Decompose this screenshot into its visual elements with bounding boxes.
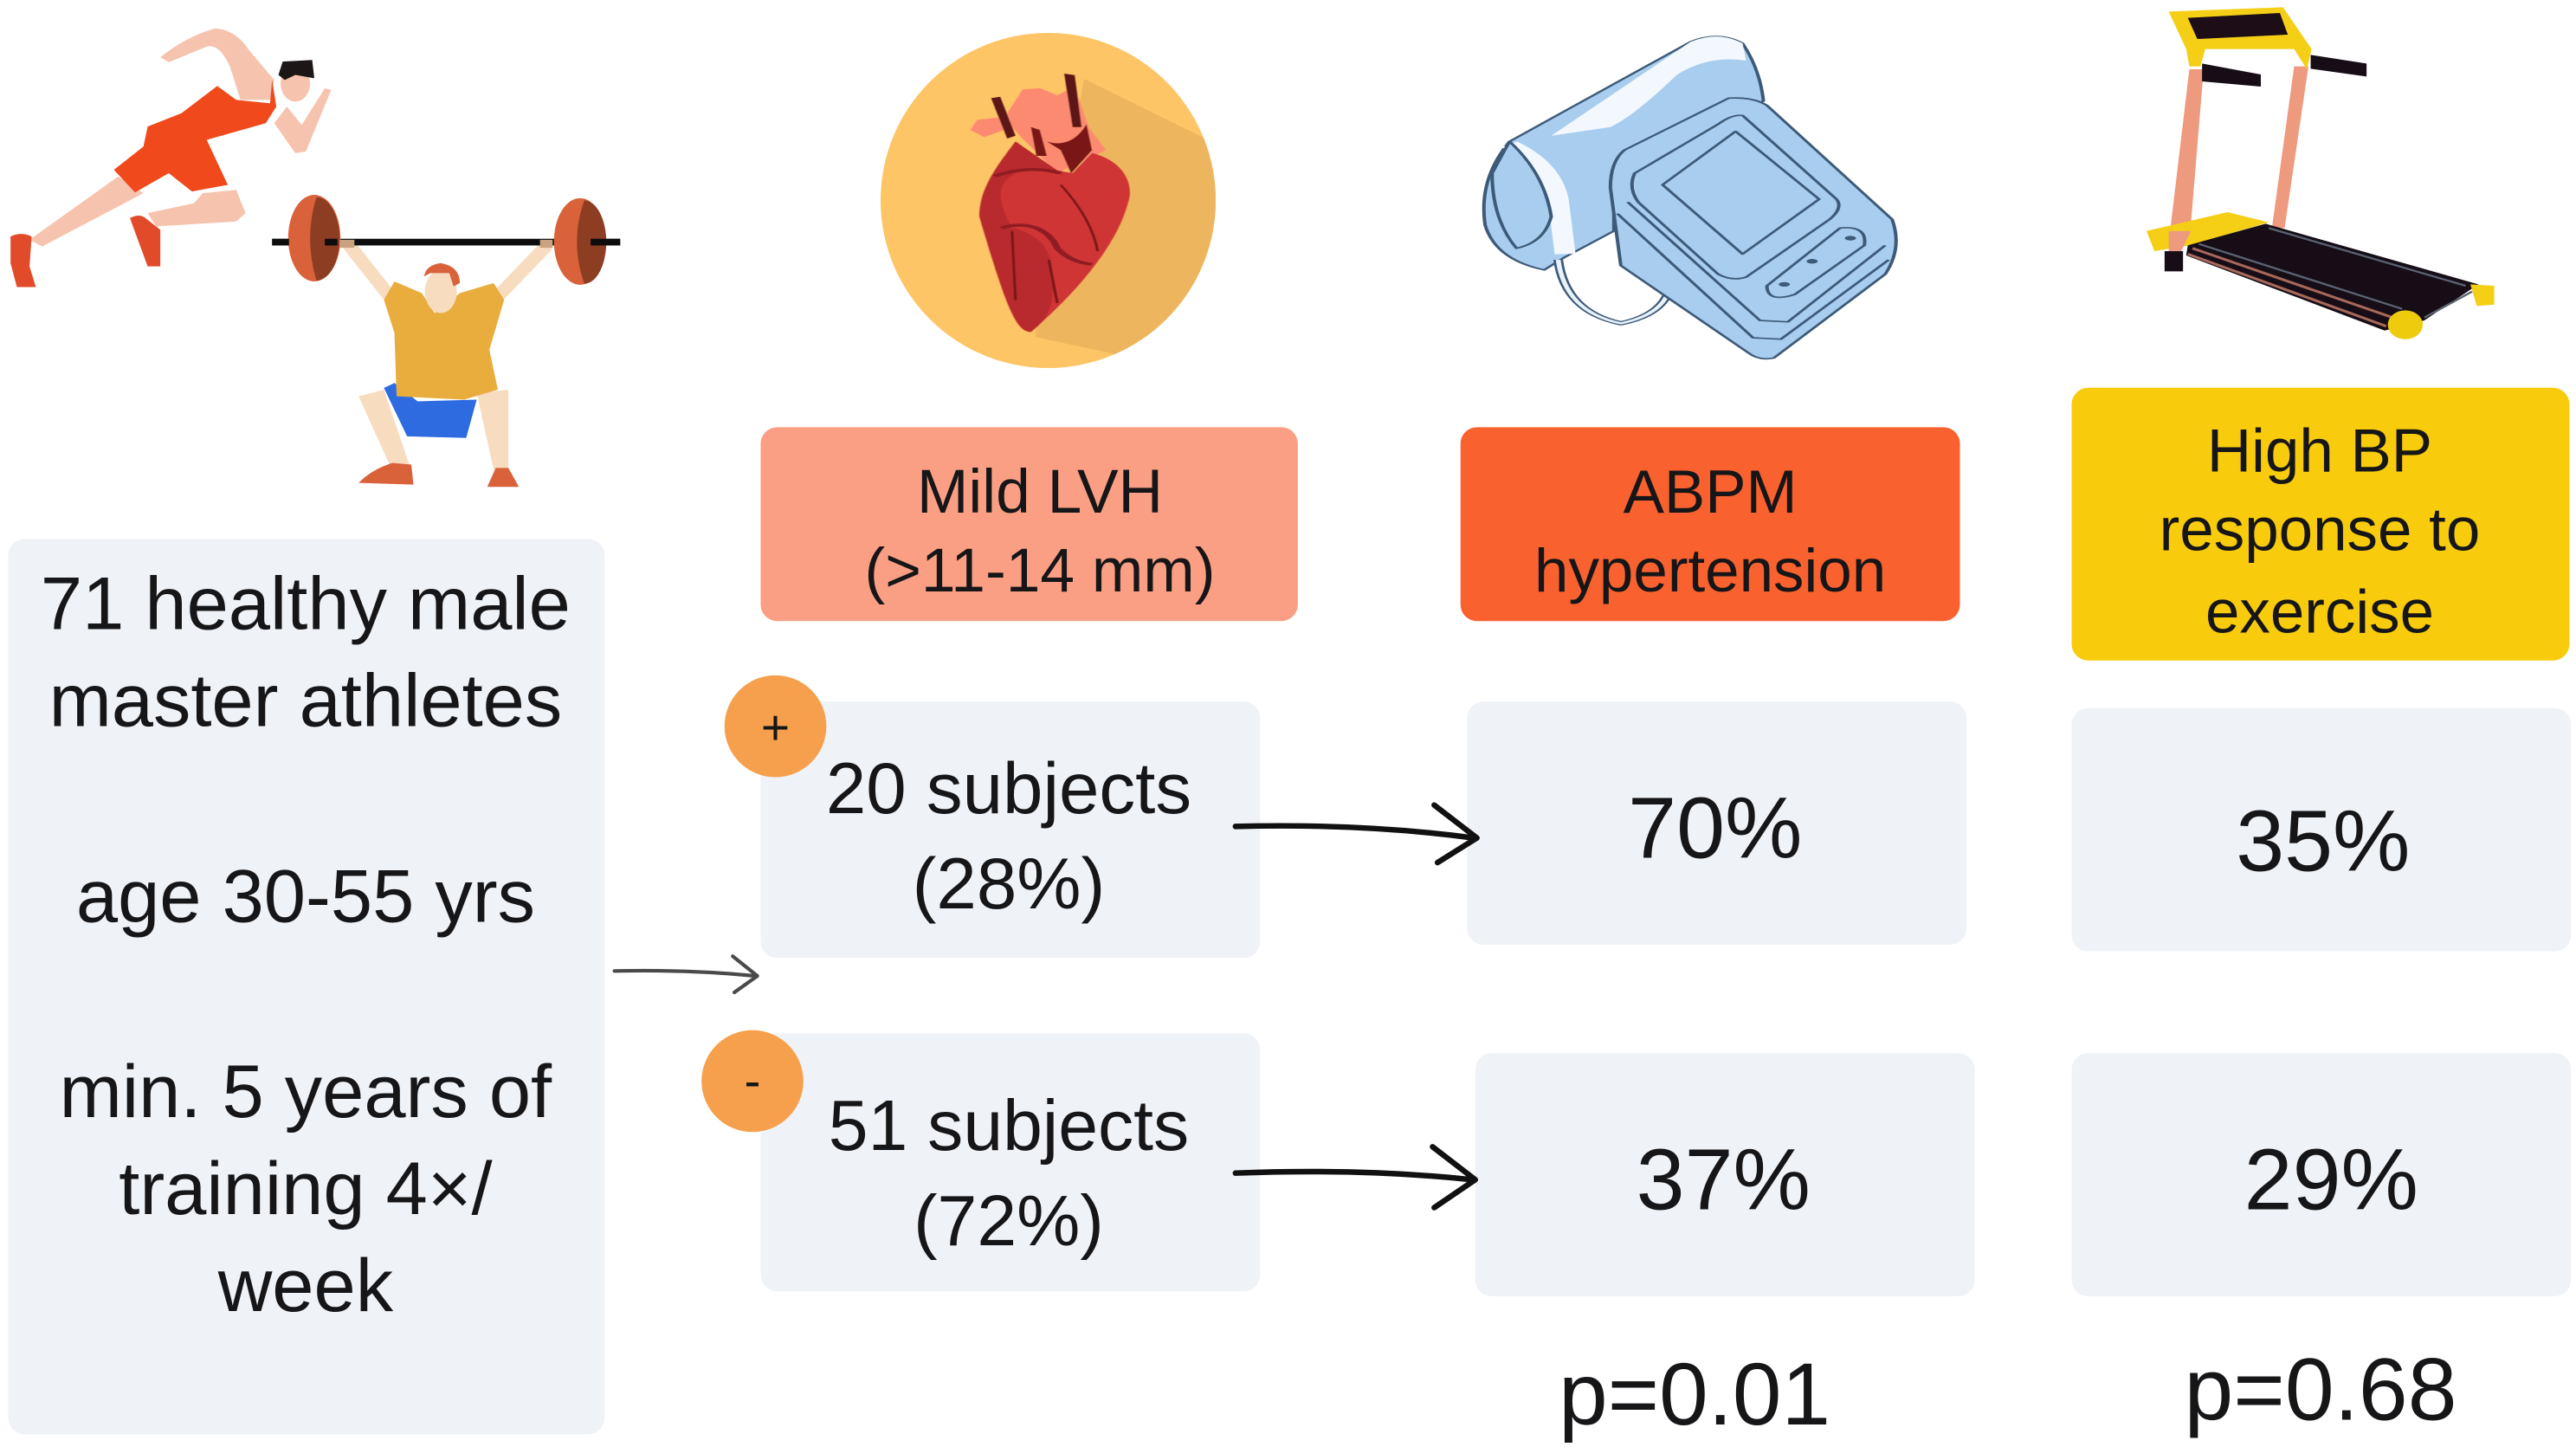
panel: 35% [2072,708,2571,952]
text: p value ABPM: p=0.01 [1559,1345,1830,1444]
panel: 20 subjects: (28%) [913,843,1105,924]
panel: cohort description: age 30-55 yrs [76,855,535,938]
badge: minus [701,1030,804,1132]
panel: 35%: 35% [2236,793,2410,890]
panel: cohort description: week [217,1244,394,1327]
panel: 51 subjects: 51 subjects [829,1086,1189,1166]
panel: cohort description [8,539,604,1434]
panel: 70%: 70% [1628,779,1802,876]
badge: plus: + [761,701,790,756]
panel: 70% [1467,701,1966,945]
heading: Mild LVH: (>11-14 mm) [865,536,1215,605]
icon: heart [881,33,1224,378]
icon: blood pressure monitor [1484,36,1896,359]
panel: 29%: 29% [2244,1131,2418,1228]
icon: treadmill [2147,7,2495,339]
icon: runner [10,29,331,287]
panel: cohort description: min. 5 years of [60,1050,552,1134]
heading: High BP response to exercise: High BP [2207,417,2432,486]
panel: 29% [2072,1053,2571,1296]
arrow: 20 subjects to 70% [1236,805,1477,862]
panel: 20 subjects: 20 subjects [826,747,1191,829]
heading: Mild LVH [760,427,1298,621]
heading: ABPM hypertension: ABPM [1624,458,1798,526]
text: p value exercise: p=0.68 [2184,1340,2457,1438]
heading: High BP response to exercise [2072,388,2569,661]
badge: plus [725,675,826,777]
badge: minus: - [744,1053,760,1108]
arrow: 51 subjects to 37% [1236,1147,1475,1208]
panel: 20 subjects [760,701,1260,958]
panel: 37% [1475,1053,1975,1296]
panel: cohort description: master athletes [49,660,562,743]
arrow: cohort to groups [615,956,758,992]
heading: ABPM hypertension [1461,427,1960,621]
panel: 37%: 37% [1637,1131,1811,1228]
heading: Mild LVH: Mild LVH [917,457,1163,526]
panel: 51 subjects: (72%) [914,1181,1104,1261]
icon: weightlifter [272,195,620,487]
panel: 51 subjects [760,1033,1260,1291]
heading: ABPM hypertension: hypertension [1534,537,1886,605]
heading: High BP response to exercise: exercise [2205,578,2434,646]
panel: cohort description: 71 healthy male [41,563,571,646]
panel: cohort description: training 4×/ [119,1147,493,1231]
heading: High BP response to exercise: response to [2160,496,2480,565]
